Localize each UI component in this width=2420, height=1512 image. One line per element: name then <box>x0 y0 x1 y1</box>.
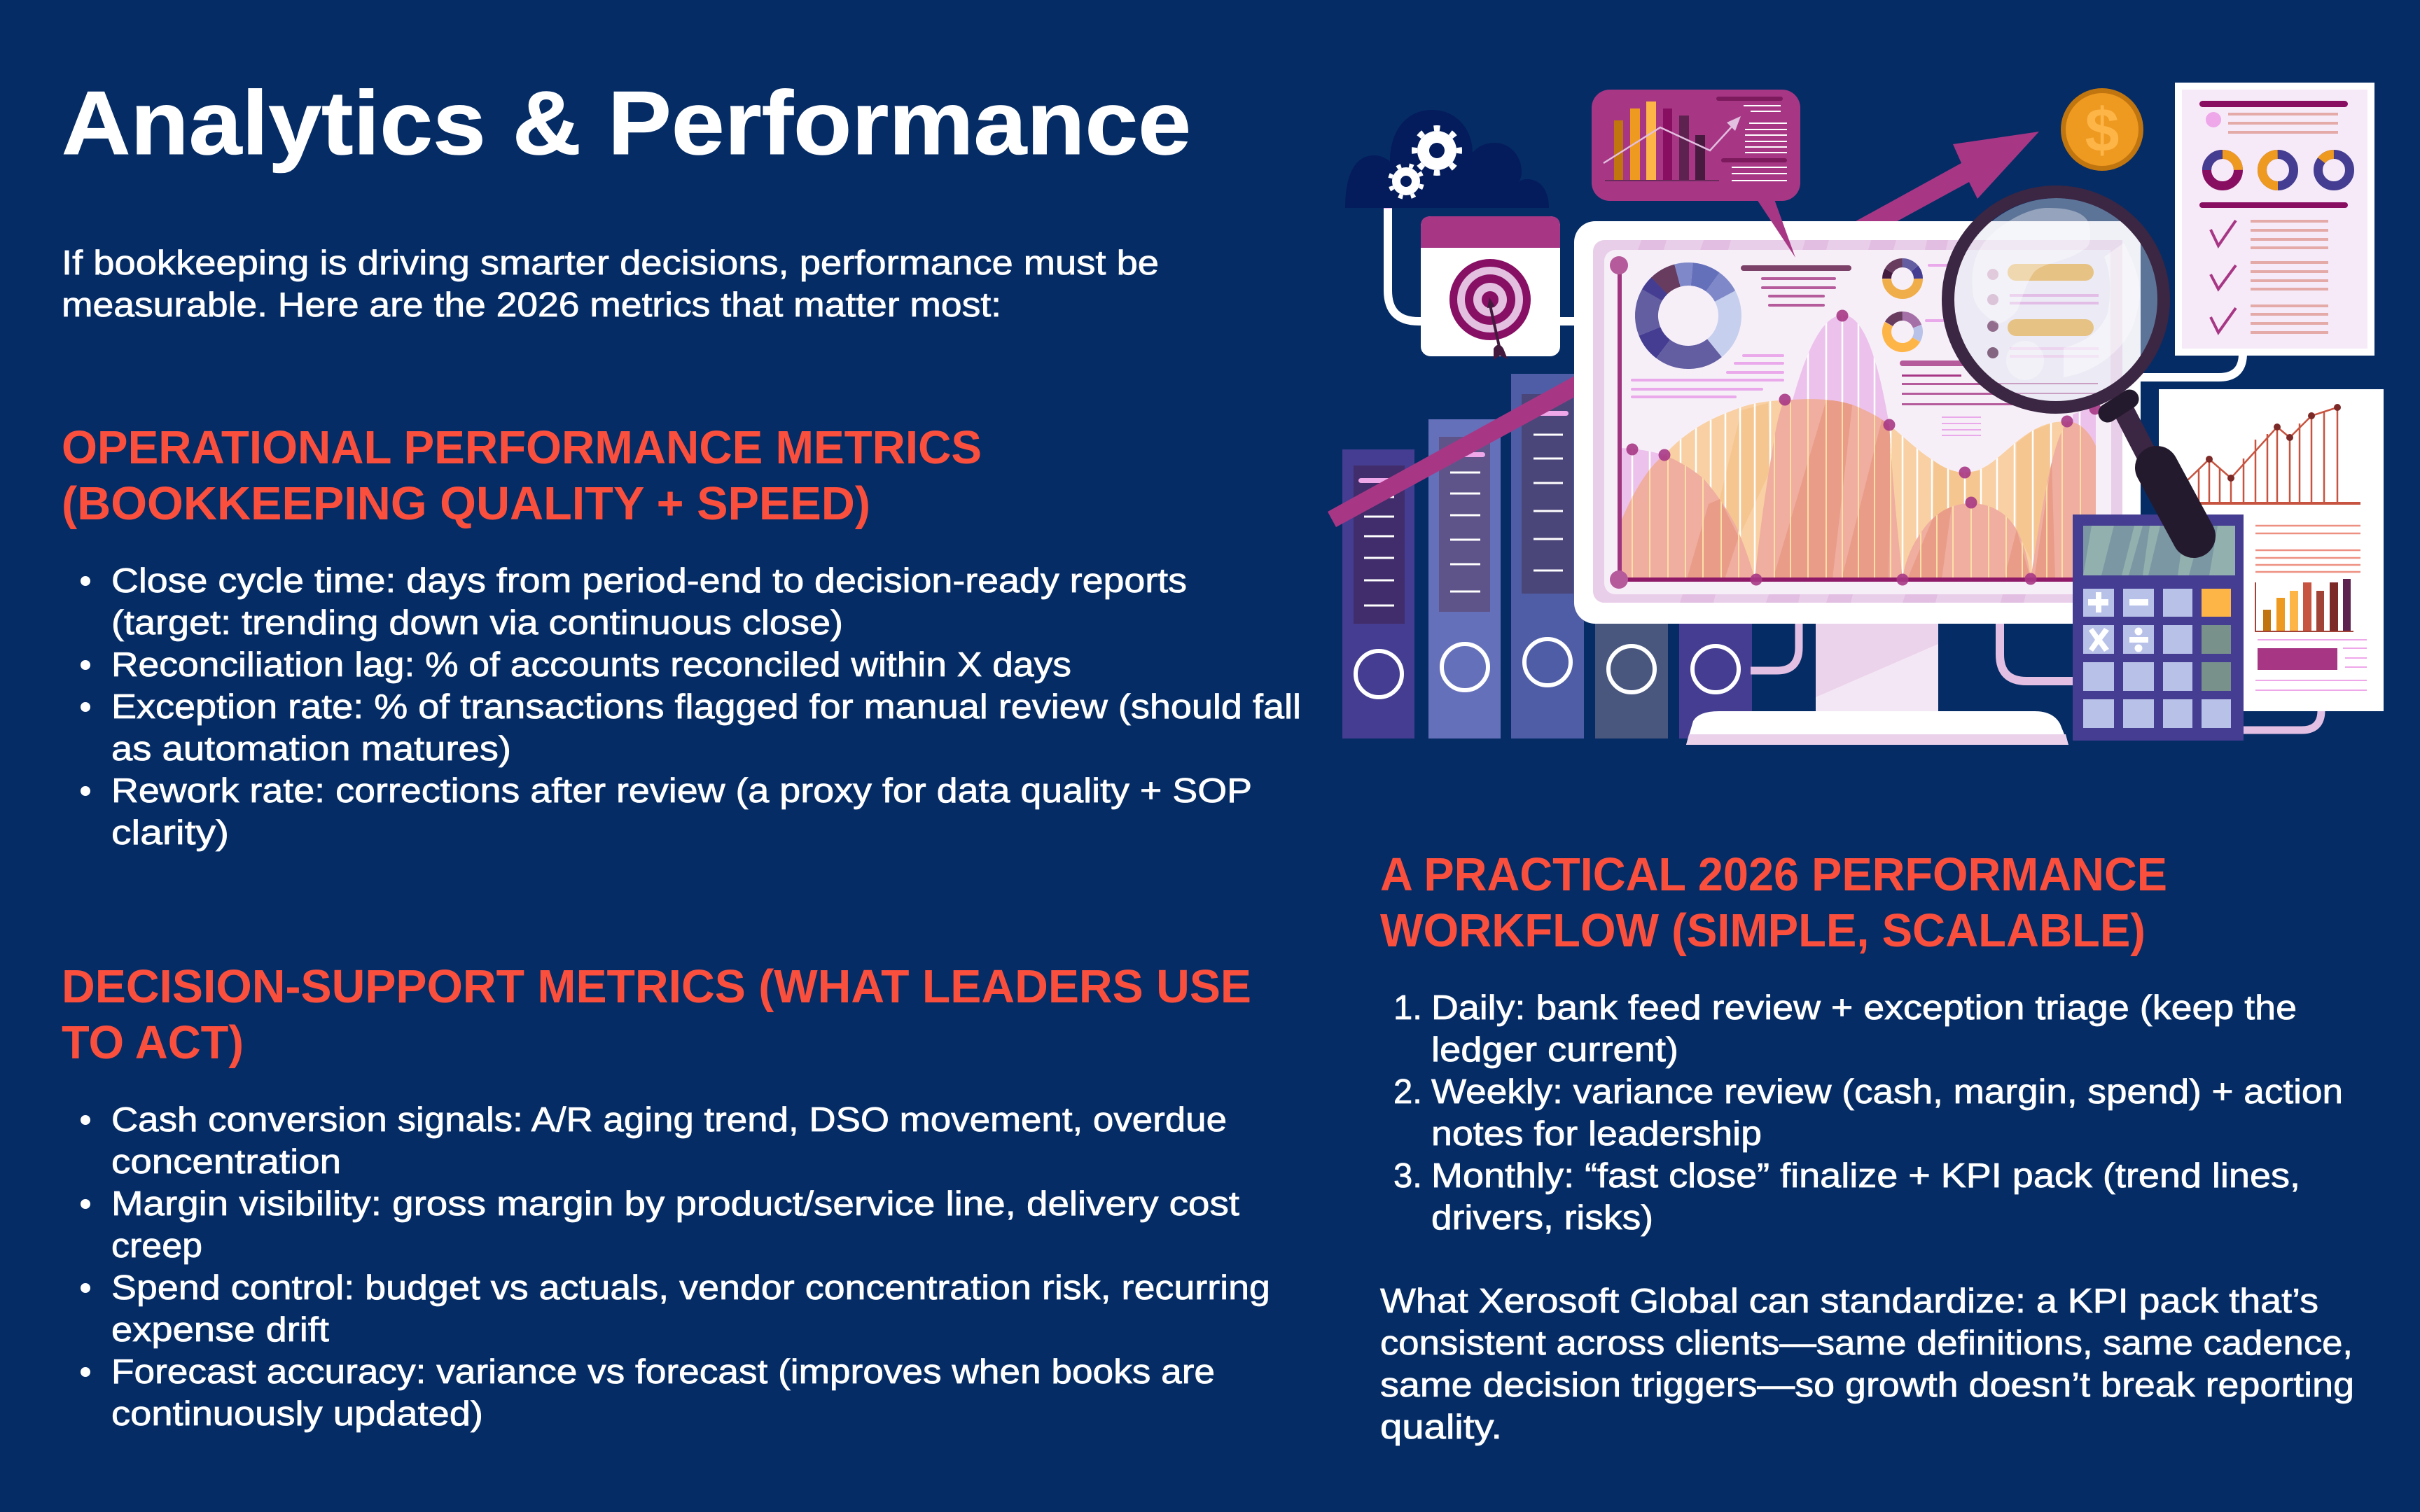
bullet: spend control <box>81 1269 1270 1349</box>
step 3: monthly: Monthly: “fast close” finalize + KPI pack (trend lines, <box>1431 1157 2300 1195</box>
icon: target <box>1449 259 1531 340</box>
intro text: measurable. Here are the 2026 metrics that matter most: <box>62 286 1001 324</box>
calculator symbols <box>2088 592 2148 652</box>
bar chart <box>2255 579 2353 631</box>
bullet: margin visibility: Margin visibility: gross margin by product/service line, delivery cost <box>111 1185 1239 1223</box>
step 1: daily <box>1393 989 2297 1069</box>
arrow: upward trend <box>1328 132 2039 527</box>
intro text <box>62 244 1159 324</box>
heading: decision-support metrics: DECISION-SUPPORT METRICS (WHAT LEADERS USE <box>62 960 1251 1013</box>
bullet: rework rate: clarity) <box>111 814 229 852</box>
list: operational metrics <box>81 562 1301 852</box>
text lines <box>2255 526 2360 572</box>
icon: dollar coin <box>2061 88 2143 171</box>
bubble: text lines <box>1716 97 1787 181</box>
bullet: close cycle time: Close cycle time: days from period-end to decision-ready reports <box>111 562 1187 600</box>
binder 4 <box>1595 602 1668 738</box>
bullet: margin visibility: creep <box>111 1227 202 1265</box>
lower block <box>2255 640 2367 690</box>
step 1: daily: 1. <box>1393 989 1422 1027</box>
step 2: weekly: 2. <box>1393 1073 1422 1111</box>
magnifier collar <box>2108 399 2129 413</box>
illustration: analytics scene <box>1328 83 2384 745</box>
bezel bands <box>1638 240 2026 603</box>
target card <box>1421 216 1560 360</box>
icon: check marks <box>2211 220 2236 332</box>
document: report with charts <box>2159 389 2384 711</box>
step 2: weekly <box>1393 1073 2343 1153</box>
screen: small donut 1 <box>1880 256 1925 301</box>
heading: practical workflow <box>1380 848 2167 957</box>
bubble: bars <box>1605 102 1719 181</box>
step 3: monthly: 3. <box>1393 1157 1422 1195</box>
screen: chart axes <box>1610 256 2074 589</box>
step 1: daily: Daily: bank feed review + exception triage (keep the <box>1431 989 2297 1027</box>
screen: small donut 2 <box>1881 310 1924 354</box>
bullet: close cycle time: (target: trending down via continuous close) <box>111 604 843 642</box>
bullet: margin visibility <box>81 1185 1239 1265</box>
paragraph: Xerosoft Global: quality. <box>1380 1408 1502 1446</box>
magnifying glass <box>1947 189 2194 536</box>
bullet: forecast accuracy: continuously updated) <box>111 1395 483 1433</box>
step 2: weekly: notes for leadership <box>1431 1115 1762 1153</box>
bubble: trend line <box>1604 116 1741 163</box>
title: Analytics & Performance <box>62 73 1191 174</box>
lens <box>1955 198 2157 401</box>
binder 2 <box>1428 419 1501 738</box>
bullet: rework rate <box>81 772 1252 852</box>
calculator keys <box>2083 589 2231 728</box>
screen: chart data points <box>1626 309 2101 585</box>
list: decision-support metrics <box>81 1101 1270 1433</box>
screen: text lines near donut <box>1631 265 1851 398</box>
monitor stand <box>1686 620 2068 745</box>
step 2: weekly: Weekly: variance review (cash, margin, spend) + action <box>1431 1073 2343 1111</box>
magnifier grip <box>2157 468 2194 536</box>
bullet: exception rate: as automation matures) <box>111 730 511 768</box>
cloud with gears <box>1345 110 1549 208</box>
paragraph: Xerosoft Global: What Xerosoft Global can standardize: a KPI pack that’s <box>1380 1282 2318 1320</box>
heading: practical workflow: WORKFLOW (SIMPLE, SCALABLE) <box>1380 904 2146 957</box>
bullet: forecast accuracy: Forecast accuracy: variance vs forecast (improves when books are <box>111 1353 1215 1391</box>
icon: large gear <box>1414 128 1459 173</box>
bullet: spend control: expense drift <box>111 1311 329 1349</box>
step 1: daily: ledger current) <box>1431 1031 1678 1069</box>
heading: operational performance metrics: OPERATIONAL PERFORMANCE METRICS <box>62 421 982 474</box>
numbered list: workflow <box>1393 989 2343 1237</box>
heading: operational performance metrics: (BOOKKEEPING QUALITY + SPEED) <box>62 477 870 530</box>
document: donut 2 <box>2262 154 2294 186</box>
line chart <box>2171 404 2360 505</box>
bullet: exception rate: Exception rate: % of transactions flagged for manual review (should fall <box>111 688 1301 726</box>
step 3: monthly <box>1393 1157 2300 1237</box>
icon: small gear <box>1386 161 1426 202</box>
icon: dollar coin: $ <box>2085 95 2119 164</box>
bullet: cash conversion signals <box>81 1101 1227 1181</box>
heading: decision-support metrics: TO ACT) <box>62 1016 244 1069</box>
icon: arrow in target <box>1487 298 1508 360</box>
binder 3 <box>1511 374 1584 738</box>
screen: large donut chart <box>1629 257 1747 374</box>
bullet: cash conversion signals: Cash conversion signals: A/R aging trend, DSO movement, overdue <box>111 1101 1227 1139</box>
bullet: cash conversion signals: concentration <box>111 1143 341 1181</box>
document: donut 3 <box>2311 148 2356 192</box>
connector: white pipes <box>1388 209 2243 377</box>
heading: operational performance metrics <box>62 421 982 530</box>
calculator <box>2073 514 2244 741</box>
heading: practical workflow: A PRACTICAL 2026 PERFORMANCE <box>1380 848 2167 901</box>
bullet: close cycle time <box>81 562 1187 642</box>
calculator screen <box>2083 526 2235 575</box>
binder 1 <box>1342 449 1414 738</box>
paragraph: Xerosoft Global <box>1380 1282 2354 1446</box>
intro text: If bookkeeping is driving smarter decisions, performance must be <box>62 244 1159 282</box>
magnifier ring <box>1948 192 2164 407</box>
bullet: exception rate <box>81 688 1301 768</box>
pipe cap <box>1384 204 1392 209</box>
screen: right text lines <box>1900 264 2098 435</box>
magnifier shaft <box>2122 407 2150 462</box>
bullet: forecast accuracy <box>81 1353 1215 1433</box>
bullet: reconciliation lag: Reconciliation lag: % of accounts reconciled within X days <box>111 646 1071 684</box>
document: donut 1 <box>2207 154 2238 186</box>
bullet: spend control: Spend control: budget vs actuals, vendor concentration risk, recurring <box>111 1269 1270 1307</box>
paragraph: Xerosoft Global: consistent across clients—same definitions, same cadence, <box>1380 1324 2353 1362</box>
document: report with donuts and checks <box>2175 83 2374 356</box>
step 3: monthly: drivers, risks) <box>1431 1199 1653 1237</box>
connector: pink pipes <box>1751 620 2321 730</box>
binder 5 <box>1679 602 1752 738</box>
monitor <box>1574 221 2141 624</box>
bullet: rework rate: Rework rate: corrections after review (a proxy for data quality + SOP <box>111 772 1252 810</box>
screen: area chart <box>1618 315 2096 581</box>
speech bubble with bar chart <box>1592 90 1800 258</box>
heading: decision-support metrics <box>62 960 1251 1069</box>
paragraph: Xerosoft Global: same decision triggers—so growth doesn’t break reporting <box>1380 1366 2354 1404</box>
